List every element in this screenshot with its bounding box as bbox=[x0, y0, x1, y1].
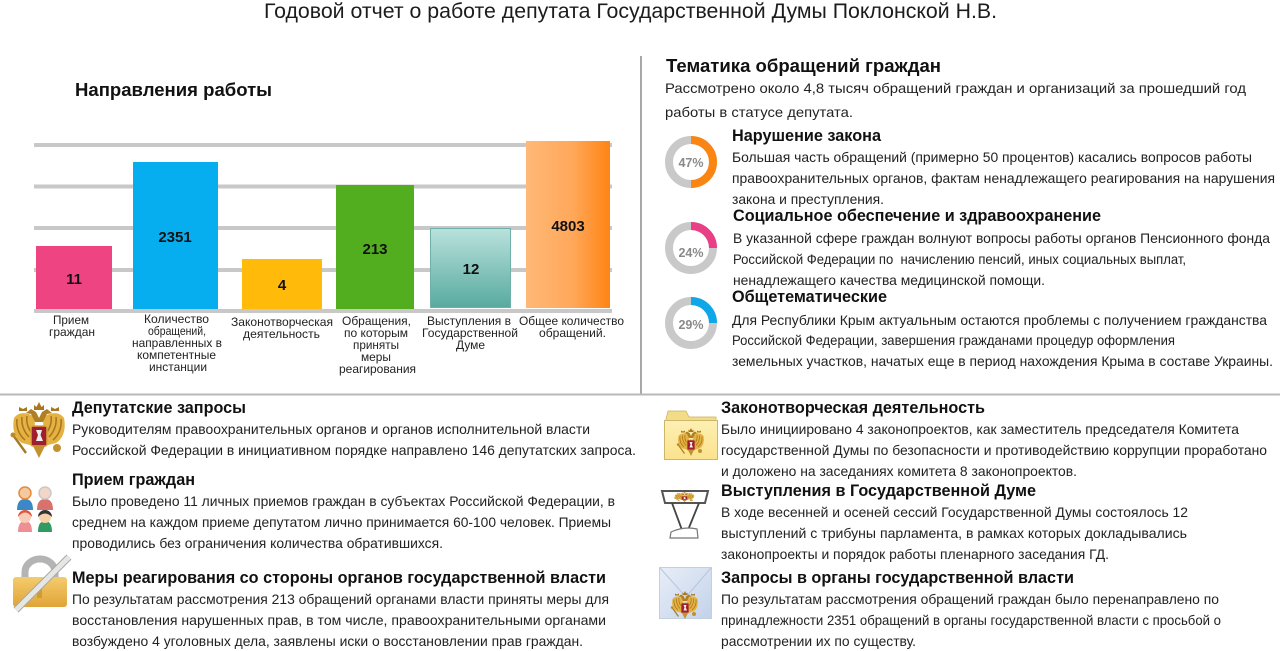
block: requests to state bodies bbox=[721, 569, 1221, 649]
donut: 29% bbox=[669, 301, 713, 345]
bar label: reception: граждан bbox=[49, 325, 95, 339]
topic: law violations: закона и преступления. bbox=[732, 191, 884, 207]
bar: legislative work bbox=[242, 259, 322, 309]
bar: forwarded appeals bbox=[133, 162, 218, 309]
bar: total appeals bbox=[526, 141, 610, 308]
topic: general bbox=[732, 288, 1273, 369]
title: Годовой отчет о работе депутата Государственной Думы Поклонской Н.В. bbox=[264, 0, 997, 23]
block: response measures: восстановления нарушенных прав, в том числе, правоохранительными органами bbox=[72, 612, 606, 628]
topic: social security and healthcare bbox=[733, 207, 1270, 288]
panel: topics of citizens' appeals bbox=[665, 55, 1275, 369]
bar label: forwarded: инстанции bbox=[149, 360, 207, 374]
donut: 24%: 24% bbox=[678, 246, 704, 260]
bar: reception of citizens bbox=[36, 246, 112, 309]
topic: law violations: правоохранительных органов, фактам ненадлежащего реагирования на нарушения bbox=[732, 170, 1275, 186]
bar label: forwarded: направленных в bbox=[132, 336, 222, 350]
topic: law violations bbox=[732, 127, 1275, 207]
block: requests to state bodies: принадлежности 2351 обращений в органы государственной власти с просьбой о bbox=[721, 612, 1221, 628]
block: speeches in the Duma: Выступления в Государственной Думе bbox=[721, 482, 1036, 500]
bar label: legislative bbox=[231, 315, 333, 341]
intro text bbox=[665, 80, 1246, 120]
panel: bar chart of work directions bbox=[34, 79, 624, 376]
topic: social security and healthcare: Социальное обеспечение и здравоохранение bbox=[733, 207, 1101, 225]
icon: crossed padlock bbox=[13, 557, 69, 610]
block: response measures bbox=[72, 569, 609, 649]
donut: 47%: 47% bbox=[678, 156, 704, 170]
bar label: total bbox=[519, 314, 624, 340]
donut: 47% bbox=[669, 140, 713, 184]
bar label: speeches: Думе bbox=[456, 338, 485, 352]
topic: general: Российской Федерации, завершения гражданами процедур оформления bbox=[732, 332, 1175, 348]
divider bbox=[640, 56, 642, 394]
bar label: speeches: Выступления в bbox=[427, 314, 511, 328]
block: reception of citizens: Было проведено 11 личных приемов граждан в субъектах Российской Федерации, в bbox=[72, 493, 615, 509]
topic: social security and healthcare: В указанной сфере граждан волнуют вопросы работы органов Пенсионного фонда bbox=[733, 230, 1270, 246]
block: speeches in the Duma bbox=[721, 482, 1188, 562]
icon: folder with emblem bbox=[664, 411, 718, 460]
topic: law violations: Большая часть обращений (примерно 50 процентов) касались вопросов работы bbox=[732, 149, 1252, 165]
heading: work directions: Направления работы bbox=[75, 79, 272, 100]
bar label: legislative: деятельность bbox=[243, 327, 320, 341]
topic: general: земельных участков, начатых еще в период нахождения Крыма в составе Украины. bbox=[732, 353, 1273, 369]
chart grid lines bbox=[34, 143, 612, 313]
block: requests to state bodies: рассмотрении их по существу. bbox=[721, 633, 916, 649]
topic: law violations: Нарушение закона bbox=[732, 127, 882, 145]
topic: general: Для Республики Крым актуальным остаются проблемы с получением гражданства bbox=[732, 312, 1267, 328]
icon: rostrum with emblem bbox=[662, 491, 708, 538]
block: speeches in the Duma: выступлений с трибуны парламента, в рамках которых докладывались bbox=[721, 525, 1187, 541]
block: legislative activity: Было инициировано 4 законопроектов, как заместитель председателя Комитета bbox=[721, 421, 1239, 437]
block: requests to state bodies: Запросы в органы государственной власти bbox=[721, 569, 1074, 587]
bar label: forwarded: Количество bbox=[144, 312, 209, 326]
bar label: legislative: Законотворческая bbox=[231, 315, 333, 329]
bar: appeals with measures: 213 bbox=[362, 241, 388, 258]
bar label: speeches: Государственной bbox=[422, 326, 518, 340]
block: deputy requests: Депутатские запросы bbox=[72, 399, 246, 417]
icon: people bbox=[17, 487, 53, 532]
bar label: forwarded bbox=[132, 312, 222, 374]
topic: social security and healthcare: Российской Федерации по начислению пенсий, иных социальных выплат, bbox=[733, 251, 1186, 267]
bar: total appeals: 4803 bbox=[551, 218, 585, 235]
topic: social security and healthcare: ненадлежащего качества медицинской помощи. bbox=[733, 272, 1045, 288]
block: legislative activity bbox=[721, 399, 1267, 479]
bar: Duma speeches: 12 bbox=[463, 261, 479, 278]
block: reception of citizens: Прием граждан bbox=[72, 471, 195, 489]
bar label: forwarded: компетентные bbox=[137, 348, 216, 362]
block: deputy requests: Руководителям правоохранительных органов и органов исполнительной власти bbox=[72, 421, 590, 437]
bar: legislative work: 4 bbox=[278, 277, 287, 294]
block: legislative activity: Законотворческая деятельность bbox=[721, 399, 985, 417]
bar: appeals with measures bbox=[336, 185, 414, 309]
intro text: работы в статусе депутата. bbox=[665, 104, 853, 120]
bar: Duma speeches bbox=[430, 228, 510, 308]
bar label: measures bbox=[339, 314, 416, 376]
icon: coat of arms bbox=[10, 402, 65, 458]
block: speeches in the Duma: В ходе весенней и осеней сессий Государственной Думы состоялось 12 bbox=[721, 504, 1188, 520]
block: deputy requests bbox=[72, 399, 636, 458]
bar label: reception: Прием bbox=[53, 313, 89, 327]
bar label: forwarded: обращений, bbox=[148, 324, 206, 338]
block: reception of citizens bbox=[72, 471, 615, 551]
block: reception of citizens: проводились без ограничения количества обратившихся. bbox=[72, 535, 443, 551]
bar label: speeches bbox=[422, 314, 518, 352]
block: legislative activity: и доложено на заседаниях комитета 8 законопроектов. bbox=[721, 463, 1077, 479]
bar label: total: обращений. bbox=[539, 326, 606, 340]
donut: 24% bbox=[669, 226, 713, 270]
donut: 29%: 29% bbox=[678, 318, 704, 332]
block: response measures: По результатам рассмотрения 213 обращений органами власти приняты меры для bbox=[72, 591, 609, 607]
block: requests to state bodies: По результатам рассмотрения обращений граждан было перенаправлено по bbox=[721, 591, 1219, 607]
bar: reception of citizens: 11 bbox=[66, 271, 82, 288]
bar label: measures: реагирования bbox=[339, 362, 416, 376]
bar: forwarded appeals: 2351 bbox=[158, 229, 192, 246]
block: legislative activity: государственной Думы по безопасности и противодействию коррупции проработано bbox=[721, 442, 1267, 458]
block: response measures: возбуждено 4 уголовных дела, заявлены иски о восстановлении прав граждан. bbox=[72, 633, 583, 649]
block: reception of citizens: среднем на каждом приеме депутатом лично принимается 60-100 человек. Приемы bbox=[72, 514, 611, 530]
intro text: Рассмотрено около 4,8 тысяч обращений граждан и организаций за прошедший год bbox=[665, 80, 1246, 96]
bar label: reception bbox=[49, 313, 95, 339]
bar label: measures: приняты bbox=[353, 338, 399, 352]
block: deputy requests: Российской Федерации в инициативном порядке направлено 146 депутатских запроса. bbox=[72, 442, 636, 458]
bar label: measures: по которым bbox=[344, 326, 408, 340]
bar label: measures: Обращения, bbox=[342, 314, 411, 328]
topic: general: Общетематические bbox=[732, 288, 887, 306]
heading: topics: Тематика обращений граждан bbox=[666, 55, 941, 76]
bar label: measures: меры bbox=[361, 350, 391, 364]
block: speeches in the Duma: законопроекты и порядок работы пленарного заседания ГД. bbox=[721, 546, 1109, 562]
bar label: total: Общее количество bbox=[519, 314, 624, 328]
icon: envelope with emblem bbox=[660, 568, 712, 619]
block: response measures: Меры реагирования со стороны органов государственной власти bbox=[72, 569, 606, 587]
